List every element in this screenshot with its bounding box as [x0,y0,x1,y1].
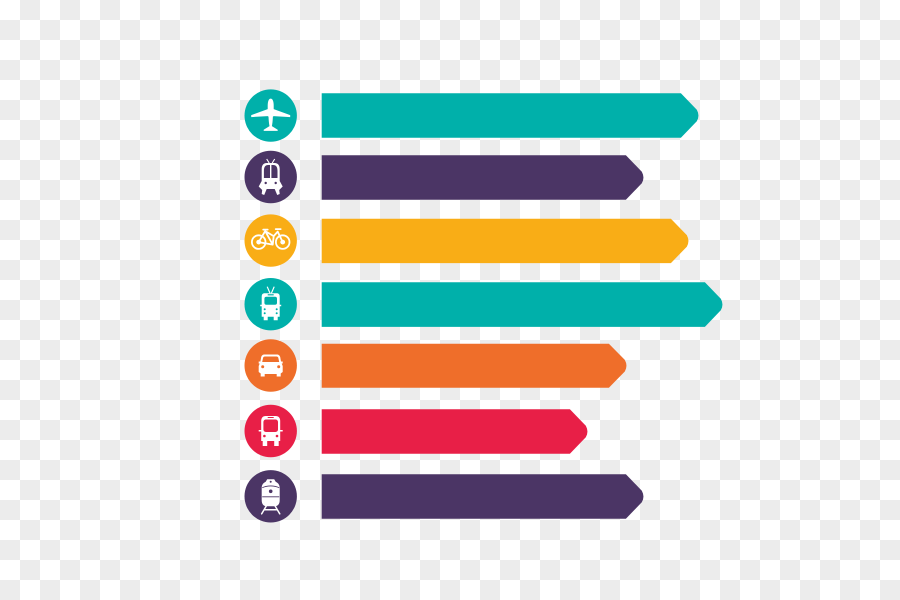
row 1: plane [245,89,698,142]
row 6: bus [245,405,587,457]
icon: tram [245,151,297,203]
row 4: trolleybus [245,278,722,330]
row 7: train [245,470,643,522]
row 3: bicycle [245,214,688,267]
bar: orange, car [322,344,626,388]
bar: teal, plane [322,93,698,138]
bar: purple, train [322,474,643,519]
icon: plane [245,89,297,142]
icon: bus [245,405,297,457]
bar: purple, tram [322,155,643,200]
bar: teal, trolleybus [322,282,722,327]
row 5: car [245,339,626,392]
bar: red, bus [322,409,587,454]
icon: train [245,470,297,522]
row 2: tram [245,151,643,203]
icon: trolleybus [245,278,297,330]
bar: yellow, bicycle [322,219,688,263]
icon: bicycle [245,214,297,267]
icon: car [245,339,297,392]
